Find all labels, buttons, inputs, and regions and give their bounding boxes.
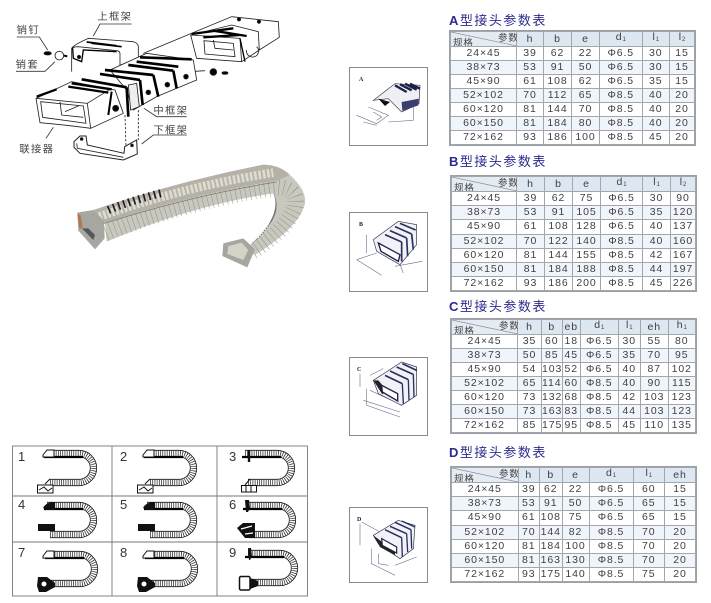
table: B type parameters: Φ8.5 (608, 235, 635, 247)
table: D type parameters: 91 (544, 497, 557, 509)
table: B type parameters: 35 (650, 206, 663, 218)
table: B type parameters: 81 (524, 249, 537, 261)
panel: C type table (449, 299, 697, 434)
table: B type parameters: b (555, 178, 562, 190)
thumbnail C: joint drawing (349, 357, 428, 436)
table: B type parameters: 52×102 (464, 235, 504, 247)
table: A type parameters: 108 (547, 75, 568, 87)
table: D type parameters: 60×150 (464, 554, 505, 566)
table: A type parameters: 45×90 (466, 75, 500, 87)
table: A type parameters: 30 (649, 61, 662, 73)
table: A type parameters: 15 (675, 61, 689, 73)
table: C type parameters: 175 (542, 419, 562, 431)
table: B type parameters: 91 (552, 206, 565, 218)
table: B type parameters: 40 (650, 235, 663, 247)
table: B type parameters: Φ6.5 (608, 192, 635, 204)
table: A type parameters: h (527, 32, 533, 44)
table: D type parameters: Φ6.5 (598, 497, 624, 509)
table: D type parameters: 163 (541, 554, 561, 566)
diagram: front connector (36, 82, 123, 128)
cell 9: 9 (229, 545, 236, 560)
table: A type parameters: Φ6.5 (607, 61, 634, 73)
table: A type parameters: 20 (675, 117, 689, 129)
panel: D type table (449, 445, 697, 583)
table: C type parameters: 52×102 (464, 377, 505, 389)
table: D type parameters: h (525, 468, 532, 480)
table: C type parameters: l1 (626, 319, 633, 331)
table: D type parameters: 108 (541, 511, 561, 523)
table: A type parameters: 50 (579, 61, 592, 73)
thumbnail B: joint drawing: B (359, 222, 363, 228)
heading: B type: B型接头参数表 (449, 154, 547, 169)
table: B type parameters: Φ6.5 (608, 206, 635, 218)
table: D type parameters: 93 (522, 568, 535, 580)
table: C type parameters: 110 (645, 419, 664, 431)
diagram: leader lines (16, 24, 187, 144)
table: D type parameters: e (572, 468, 579, 480)
table: A type parameters: 15 (675, 47, 689, 59)
panel: A type table (449, 13, 696, 146)
table: C type parameters: 60 (545, 335, 558, 347)
table: C type parameters: 85 (545, 349, 558, 361)
table: A type parameters: 81 (523, 103, 537, 115)
near connector (77, 210, 105, 249)
table: C type parameters: 102 (672, 363, 692, 375)
table: A type parameters: Φ6.5 (607, 75, 634, 87)
table: A type parameters: 144 (547, 103, 568, 115)
table: A type parameters: 184 (547, 117, 568, 129)
table: A type parameters: 40 (649, 117, 662, 129)
diagram labels: 上框架 (97, 10, 132, 23)
table: B type parameters: l1 (653, 176, 660, 188)
table: A type parameters: l1 (652, 31, 659, 43)
table: C type parameters: b (548, 320, 555, 332)
table: C type parameters: eb (564, 320, 578, 332)
table: B type parameters: 155 (576, 249, 597, 261)
table: C type parameters: Φ8.5 (586, 405, 613, 417)
table: A type parameters: 80 (579, 117, 592, 129)
table: C type parameters: eh (648, 320, 661, 332)
side face (105, 175, 305, 255)
table: C type parameters: 50 (523, 349, 536, 361)
table: A type parameters: 72×162 (463, 131, 504, 143)
table: A type parameters: 70 (579, 103, 592, 115)
table: A type parameters: d1 (616, 31, 626, 43)
table: D type parameters: Φ8.5 (598, 568, 624, 580)
heading: C type: C型接头参数表 (449, 299, 547, 314)
cell 3: 3 (229, 449, 236, 464)
table: A type parameters: 45 (649, 131, 662, 143)
table: D type parameters: 15 (673, 511, 687, 523)
cell 2: 2 (120, 449, 127, 464)
table: C type parameters: 135 (672, 419, 692, 431)
table: D type parameters: Φ8.5 (598, 540, 624, 552)
table: A type parameters: 81 (523, 117, 537, 129)
table: A type parameters: 62 (579, 75, 592, 87)
table: B type parameters: 188 (576, 263, 597, 275)
diagram labels (16, 10, 188, 155)
diagram labels: 销钉 (17, 23, 40, 36)
table: C type parameters: 30 (622, 335, 636, 347)
panel: installation types grid (12, 446, 308, 596)
cell 5 (120, 497, 194, 534)
table: B type parameters: Φ8.5 (608, 249, 635, 261)
table: A type parameters: 15 (675, 75, 689, 87)
table: D type parameters: 75 (569, 511, 582, 523)
table: D type parameters: 100 (565, 540, 586, 552)
table: C type parameters: 54 (523, 363, 536, 375)
table: D type parameters: 53 (522, 497, 535, 509)
table: D type parameters: 20 (673, 568, 687, 580)
table: B type parameters: 128 (576, 220, 597, 232)
table: D type parameters: 75 (642, 568, 655, 580)
table: A type parameters: 52×102 (463, 89, 504, 101)
table: C type parameters: 45×90 (468, 363, 502, 375)
cell 5: 5 (120, 497, 127, 512)
table: C type parameters: 123 (672, 391, 692, 403)
table: D type parameters: 82 (569, 526, 582, 538)
cell 2 (120, 449, 194, 493)
table: D type parameters: 70 (642, 540, 655, 552)
table: B type parameters: 186 (548, 277, 569, 289)
table: C type parameters: 115 (672, 377, 691, 389)
table: A type parameters: b (554, 32, 561, 44)
table: B type parameters: 120 (673, 206, 693, 218)
table: C type parameters: 65 (523, 377, 536, 389)
table: D type parameters: 15 (673, 497, 687, 509)
table: C type parameters: 60×150 (464, 405, 505, 417)
table: B type parameters: d1 (616, 176, 627, 188)
thumbnail C: joint drawing: C (357, 367, 361, 373)
table: B type parameters (450, 175, 697, 292)
table: B type parameters: 81 (524, 263, 537, 275)
table: A type parameters: 40 (649, 103, 662, 115)
table: D type parameters: 130 (565, 554, 586, 566)
table: D type parameters: 20 (673, 526, 687, 538)
table: A type parameters: 60×150 (463, 117, 504, 129)
table: A type parameters: Φ6.5 (607, 47, 634, 59)
table: D type parameters: Φ8.5 (598, 526, 624, 538)
table: B type parameters: 38×73 (467, 206, 501, 218)
heading: A type: A型接头参数表 (449, 13, 547, 28)
table: A type parameters: 70 (523, 89, 537, 101)
table: C type parameters: Φ6.5 (586, 349, 613, 361)
table: D type parameters: 20 (673, 540, 687, 552)
table: B type parameters: 39 (524, 192, 537, 204)
diagram labels: 下框架 (153, 123, 188, 136)
table: C type parameters: 55 (648, 335, 661, 347)
table: A type parameters: 53 (523, 61, 537, 73)
photo: metal cable carrier (77, 164, 306, 268)
table: C type parameters: 87 (648, 363, 661, 375)
table: D type parameters: 24×45 (468, 483, 502, 495)
table: C type parameters: 40 (622, 377, 636, 389)
cell 4 (18, 497, 94, 534)
table: A type parameters: 91 (551, 61, 564, 73)
table: D type parameters: 140 (565, 568, 586, 580)
table: C type parameters: 18 (564, 335, 578, 347)
table: B type parameters: 122 (548, 235, 569, 247)
table: A type parameters: 100 (575, 131, 596, 143)
table: A type parameters: 39 (523, 47, 537, 59)
table: C type parameters: 123 (672, 405, 692, 417)
cell 1 (18, 449, 94, 493)
cell 7: 7 (18, 545, 25, 560)
table: C type parameters: 73 (523, 405, 536, 417)
table: C type parameters: 45 (564, 349, 578, 361)
table: D type parameters: 39 (522, 483, 535, 495)
diagram: upper frame (72, 38, 138, 72)
cell 7 (18, 545, 94, 592)
table: D type parameters: 52×102 (464, 526, 505, 538)
table: B type parameters: 42 (650, 249, 663, 261)
table: B type parameters: 75 (580, 192, 593, 204)
table: B type parameters: 53 (524, 206, 537, 218)
table: D type parameters: 72×162 (464, 568, 505, 580)
table: C type parameters: 38×73 (468, 349, 502, 361)
table: D type parameters (450, 466, 697, 583)
table: B type parameters: 45 (650, 277, 663, 289)
table: A type parameters (449, 30, 696, 146)
table: B type parameters: 30 (650, 192, 663, 204)
table: C type parameters: 35 (523, 335, 536, 347)
table: C type parameters: 103 (542, 363, 562, 375)
cell 1: 1 (18, 449, 25, 464)
table: A type parameters: 20 (675, 103, 689, 115)
table: D type parameters: 70 (522, 526, 535, 538)
far connector (222, 238, 255, 267)
table: A type parameters: Φ8.5 (607, 117, 634, 129)
table: B type parameters: 140 (576, 235, 597, 247)
inner curve shiny face (247, 192, 293, 248)
table: B type parameters: 137 (673, 220, 693, 232)
table: A type parameters: 20 (675, 89, 689, 101)
table: C type parameters: 35 (622, 349, 636, 361)
table: C type parameters: 68 (564, 391, 578, 403)
table: B type parameters: h (527, 178, 534, 190)
diagram: middle links (82, 53, 197, 117)
table: C type parameters: d1 (594, 319, 604, 331)
table: C type parameters: h (526, 320, 533, 332)
table: C type parameters: 95 (675, 349, 688, 361)
cell 3 (229, 449, 292, 492)
table: B type parameters: 70 (524, 235, 537, 247)
table: B type parameters: 90 (676, 192, 690, 204)
table: D type parameters: Φ6.5 (598, 511, 624, 523)
cell 8 (120, 545, 194, 592)
cell 6 (229, 497, 292, 538)
table: B type parameters: 72×162 (464, 277, 504, 289)
table: B type parameters: l2 (680, 176, 686, 188)
table: B type parameters: 61 (524, 220, 537, 232)
table: A type parameters: 186 (547, 131, 568, 143)
table: B type parameters: 144 (548, 249, 569, 261)
thumbnail D: joint drawing (349, 507, 428, 583)
table: B type parameters: 45×90 (467, 220, 501, 232)
table: A type parameters: Φ8.5 (607, 89, 634, 101)
table: B type parameters: 44 (650, 263, 663, 275)
table: D type parameters: eh (673, 468, 687, 480)
table: A type parameters: 65 (579, 89, 592, 101)
table: D type parameters: 15 (673, 483, 687, 495)
table: C type parameters: 70 (648, 349, 661, 361)
table: D type parameters: 65 (642, 511, 655, 523)
table: C type parameters: 60×120 (464, 391, 505, 403)
table: D type parameters: d1 (606, 467, 616, 479)
table: B type parameters: 160 (673, 235, 693, 247)
table: D type parameters: 60×120 (464, 540, 505, 552)
table: C type parameters: 132 (542, 391, 562, 403)
exploded assembly diagram (16, 10, 280, 160)
table: B type parameters: 24×45 (467, 192, 501, 204)
table: C type parameters: 45 (622, 419, 636, 431)
table: D type parameters: 20 (673, 554, 687, 566)
cell 4: 4 (18, 497, 25, 512)
table: C type parameters: 114 (542, 377, 561, 389)
heading: D type: D型接头参数表 (449, 445, 547, 460)
thumbnail D: joint drawing: D (357, 517, 362, 523)
table: C type parameters: 83 (564, 405, 578, 417)
table: D type parameters: b (547, 468, 554, 480)
diagram labels: 中框架 (153, 104, 188, 117)
table: C type parameters: h1 (677, 319, 687, 331)
thumbnail B: joint drawing (349, 212, 428, 292)
table: A type parameters: 112 (548, 89, 567, 101)
table: B type parameters: 60×120 (464, 249, 504, 261)
table: C type parameters: 24×45 (468, 335, 502, 347)
panel: B type table (449, 154, 697, 292)
table: B type parameters: Φ8.5 (608, 277, 635, 289)
table: D type parameters: Φ6.5 (598, 483, 624, 495)
table: D type parameters: 70 (642, 526, 655, 538)
diagram labels: 联接器 (19, 142, 54, 155)
table: C type parameters: Φ8.5 (586, 419, 613, 431)
table: D type parameters: 61 (522, 511, 535, 523)
thumbnail A: joint drawing: A (359, 77, 364, 83)
table: A type parameters: 62 (551, 47, 564, 59)
table: D type parameters: 60 (642, 483, 655, 495)
table: A type parameters: 20 (675, 131, 689, 143)
table: B type parameters: 226 (673, 277, 693, 289)
table: C type parameters: 90 (648, 377, 661, 389)
table: B type parameters: 93 (524, 277, 537, 289)
table: A type parameters: 40 (649, 89, 662, 101)
table: C type parameters: 103 (644, 405, 664, 417)
table: B type parameters: 105 (576, 206, 597, 218)
cell 9 (229, 545, 294, 590)
table: D type parameters: 175 (541, 568, 561, 580)
table: A type parameters: Φ8.5 (607, 131, 634, 143)
table: B type parameters: 108 (548, 220, 569, 232)
table: C type parameters: Φ6.5 (586, 363, 613, 375)
table: C type parameters (450, 318, 697, 434)
table: D type parameters: 184 (541, 540, 561, 552)
top face with slots (93, 165, 290, 223)
table: C type parameters: 80 (675, 335, 688, 347)
diagram: lower frame (74, 110, 138, 160)
table: C type parameters: 40 (622, 363, 636, 375)
diagram: rear connector (143, 17, 279, 62)
table: A type parameters: Φ8.5 (607, 103, 634, 115)
table: C type parameters: 42 (622, 391, 636, 403)
table: D type parameters: 81 (522, 554, 535, 566)
table: C type parameters: 44 (622, 405, 636, 417)
table: D type parameters: 144 (541, 526, 561, 538)
table: C type parameters: 72×162 (464, 419, 505, 431)
table: A type parameters: 35 (649, 75, 662, 87)
table: A type parameters: l2 (679, 31, 685, 43)
table: C type parameters: Φ6.5 (586, 335, 613, 347)
table: B type parameters: e (583, 178, 590, 190)
table: C type parameters: 95 (564, 419, 578, 431)
diagram: pin and sleeve parts (44, 51, 228, 75)
table: A type parameters: 24×45 (466, 47, 500, 59)
thumbnail A: joint drawing (349, 67, 428, 146)
table: C type parameters: 73 (523, 391, 536, 403)
table: B type parameters: 167 (673, 249, 693, 261)
table: B type parameters: 197 (673, 263, 693, 275)
table: D type parameters: 38×73 (468, 497, 502, 509)
table: C type parameters: 85 (523, 419, 536, 431)
table: A type parameters: 38×73 (466, 61, 500, 73)
table: B type parameters: 184 (548, 263, 569, 275)
table: A type parameters: e (582, 32, 589, 44)
cell 8: 8 (120, 545, 127, 560)
table: D type parameters: 50 (569, 497, 582, 509)
table: C type parameters: 60 (564, 377, 578, 389)
table: D type parameters: 70 (642, 554, 655, 566)
table: C type parameters: Φ8.5 (586, 391, 613, 403)
grid lines (12, 446, 308, 596)
table: B type parameters: Φ8.5 (608, 263, 635, 275)
table: C type parameters: 163 (542, 405, 562, 417)
table: B type parameters: 62 (552, 192, 565, 204)
table: C type parameters: 103 (644, 391, 664, 403)
table: A type parameters: 30 (649, 47, 662, 59)
table: A type parameters: 93 (523, 131, 537, 143)
table: B type parameters: Φ6.5 (608, 220, 635, 232)
table: D type parameters: 65 (642, 497, 655, 509)
table: C type parameters: 52 (564, 363, 578, 375)
table: A type parameters: 22 (579, 47, 592, 59)
table: C type parameters: Φ8.5 (586, 377, 613, 389)
table: D type parameters: 22 (569, 483, 582, 495)
table: A type parameters: 60×120 (463, 103, 504, 115)
diagram labels: 销套 (16, 58, 39, 71)
table: D type parameters: 62 (544, 483, 557, 495)
table: D type parameters: l1 (645, 467, 652, 479)
cell 6: 6 (229, 497, 236, 512)
table: D type parameters: Φ8.5 (598, 554, 624, 566)
table: D type parameters: 81 (522, 540, 535, 552)
table: B type parameters: 60×150 (464, 263, 504, 275)
table: A type parameters: 61 (523, 75, 537, 87)
table: B type parameters: 200 (576, 277, 597, 289)
table: D type parameters: 45×90 (468, 511, 502, 523)
table: B type parameters: 40 (650, 220, 663, 232)
